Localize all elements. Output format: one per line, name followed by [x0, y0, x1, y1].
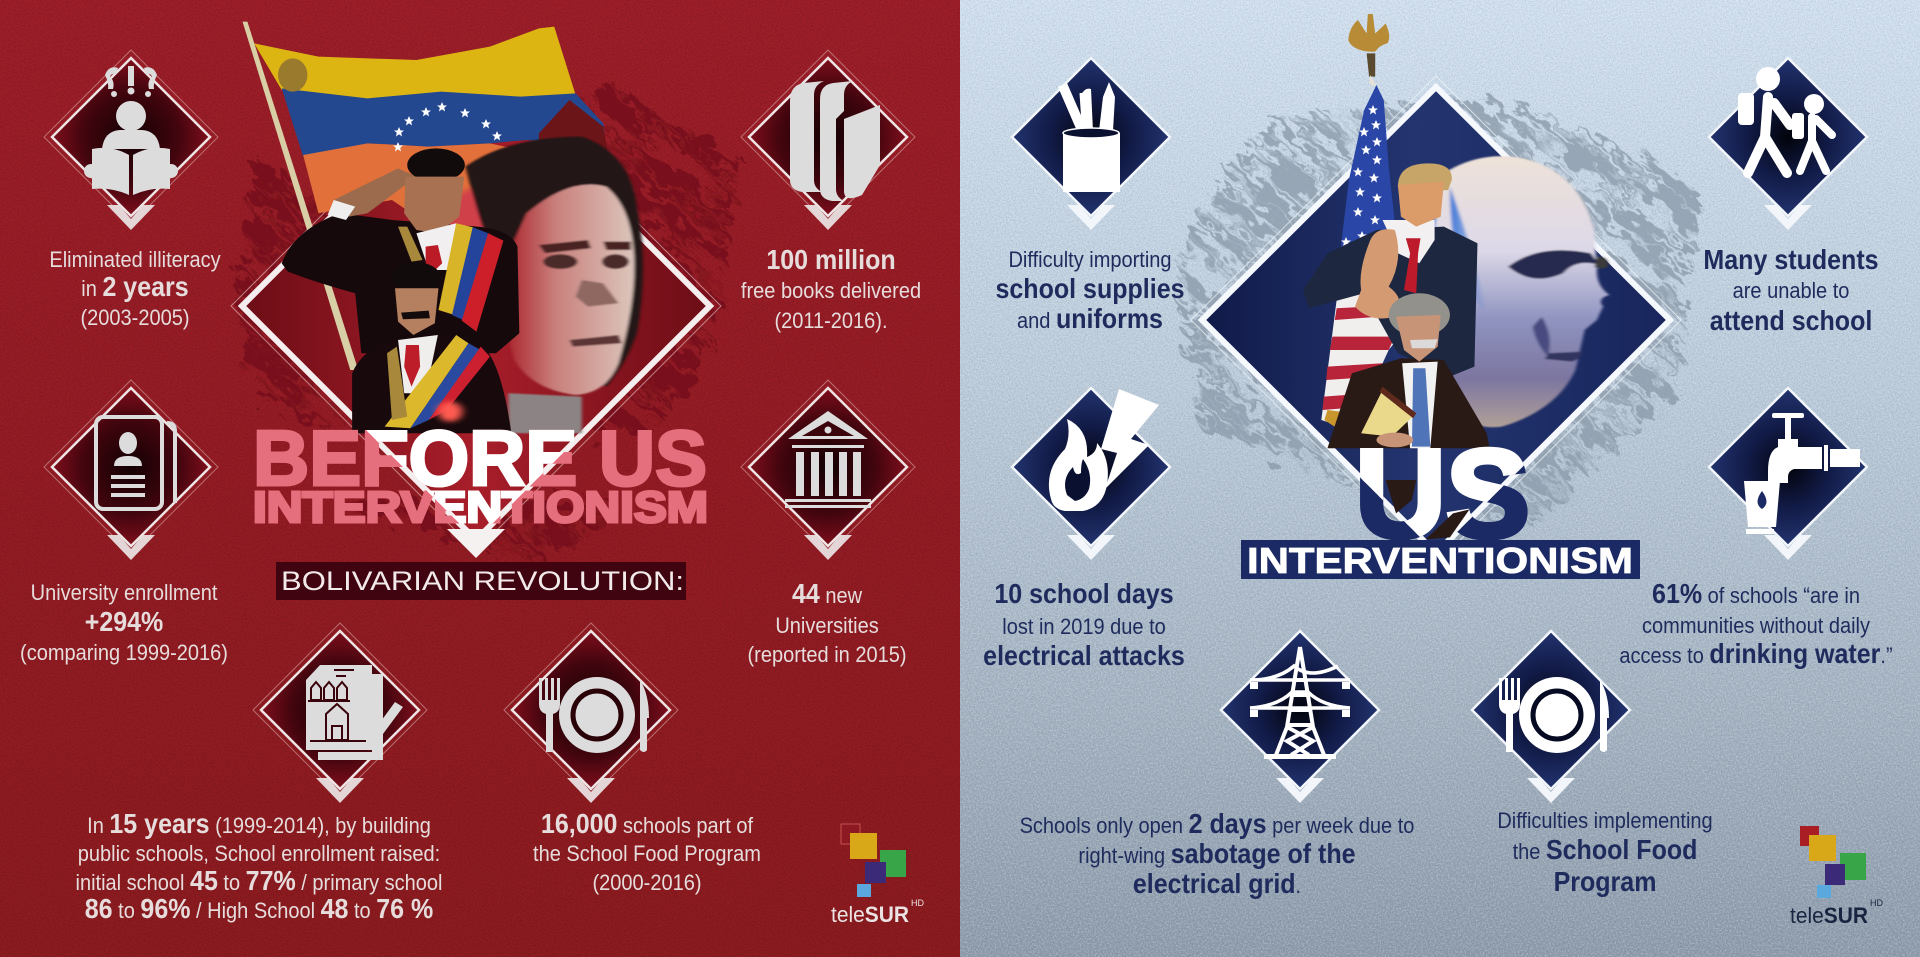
- logo: teleSUR left: teleSUR: [831, 902, 909, 927]
- text: school days lost: electrical attacks: [983, 640, 1185, 671]
- text: illiteracy: in 2 years: [81, 271, 189, 302]
- text: universities: (reported in 2015): [747, 643, 907, 667]
- text: school enrollment: 86 to 96% / High School 48 to 76 %: [85, 893, 433, 924]
- item: illiteracy icon: [44, 50, 218, 230]
- title text white overlap: BEFORE US: [253, 414, 707, 502]
- item: universities icon: [741, 380, 915, 560]
- suit showing through letters: [1386, 480, 1470, 539]
- portrait: Chavez saluting: [282, 148, 519, 353]
- panel: US interventionism: [948, 0, 1920, 957]
- title text white overlap: [366, 429, 574, 524]
- portrait: bald face with blue glow: [1425, 156, 1609, 427]
- text: drinking water: access to drinking water.”: [1619, 638, 1893, 669]
- flag of Venezuela on pole: [243, 22, 608, 370]
- portrait: Bolivar: [441, 137, 643, 433]
- interventionism banner: INTERVENTIONISM: [1247, 540, 1633, 581]
- brush stroke behind portraits: [948, 0, 1920, 819]
- item: students icon: [1709, 58, 1867, 230]
- text: drinking water: communities without daily: [1642, 614, 1870, 638]
- flag stars: [1341, 105, 1382, 276]
- portrait: Maduro: [352, 262, 511, 433]
- title: US interventionism: [1241, 446, 1640, 579]
- item: water tap icon: [1709, 388, 1867, 560]
- text: school enrollment: In 15 years (1999-2014), by building: [87, 808, 431, 839]
- item: enrollment icon: [44, 380, 218, 560]
- big US letters white overlap: US: [1355, 425, 1530, 564]
- red textured background: [0, 0, 960, 957]
- logo: teleSUR right: [1790, 826, 1883, 928]
- text: school days lost: 10 school days: [994, 578, 1174, 609]
- pale blue textured background: [960, 0, 1920, 957]
- text: books: (2011-2016).: [774, 309, 888, 333]
- item: school supplies icon: [1012, 58, 1170, 230]
- text: school food difficulties: the School Food: [1513, 834, 1697, 865]
- text: school supplies: school supplies: [995, 273, 1185, 304]
- portrait: Trump hugging flag: [1303, 163, 1477, 377]
- text: books: free books delivered: [741, 279, 921, 303]
- text: school enrollment: public schools, School enrollment raised:: [78, 842, 440, 866]
- item: books icon: [741, 50, 915, 230]
- item: school food icon: [504, 623, 678, 803]
- text: school enrollment: initial school 45 to 77% / primary school: [76, 865, 442, 896]
- text: school food: (2000-2016): [593, 871, 701, 895]
- US flag with eagle finial: [1321, 14, 1402, 430]
- text: universities: Universities: [775, 614, 879, 638]
- text: illiteracy: (2003-2005): [81, 306, 189, 330]
- central diamond: [231, 61, 721, 551]
- arrow down: [447, 529, 505, 558]
- text: electrical grid: right-wing sabotage of the: [1078, 838, 1356, 869]
- logo: teleSUR right: HD: [1870, 898, 1883, 908]
- portrait: Bolton with folder: [1327, 293, 1490, 448]
- text: school food: the School Food Program: [533, 842, 761, 866]
- text: university enrollment: (comparing 1999-2016): [20, 641, 228, 665]
- text: school food difficulties: Program: [1554, 866, 1656, 897]
- central diamond: [1191, 76, 1681, 564]
- text: books: 100 million: [766, 244, 896, 275]
- logo: teleSUR left: HD: [911, 898, 924, 908]
- heading: Bolivarian Revolution: [276, 562, 686, 600]
- logo: teleSUR left: [831, 824, 924, 927]
- brush stroke behind portraits: [0, 0, 976, 814]
- text: electrical grid: Schools only open 2 days per week due to: [1020, 808, 1414, 839]
- text: illiteracy: Eliminated illiteracy: [49, 248, 221, 272]
- item: electric tower icon: [1221, 631, 1379, 803]
- text: university enrollment: University enrollment: [31, 581, 218, 605]
- text: universities: 44 new: [792, 578, 862, 609]
- title text pink: INTERVENTIONISM: [253, 483, 708, 532]
- text: many students: are unable to: [1733, 279, 1849, 303]
- text: electrical grid: electrical grid.: [1133, 868, 1301, 899]
- panel: before US interventionism: [0, 0, 976, 957]
- item: school food icon: [1472, 631, 1630, 803]
- text: school food: 16,000 schools part of: [541, 808, 753, 839]
- title: before US interventionism: [254, 429, 706, 524]
- heading: Bolivarian Revolution: BOLIVARIAN REVOLUTION:: [281, 566, 684, 596]
- text: many students: Many students: [1703, 244, 1879, 275]
- title text pink: BEFORE US: [253, 414, 707, 502]
- logo: teleSUR right: teleSUR: [1790, 903, 1868, 928]
- flag stars: [393, 102, 502, 152]
- text: school days lost: lost in 2019 due to: [1002, 615, 1166, 639]
- title text white overlap: INTERVENTIONISM: [253, 483, 708, 532]
- text: school supplies: and uniforms: [1017, 303, 1163, 334]
- text: many students: attend school: [1710, 305, 1872, 336]
- text: drinking water: 61% of schools “are in: [1652, 578, 1860, 609]
- item: fire and lightning icon: [1012, 388, 1170, 560]
- item: school building icon: [253, 623, 427, 803]
- text: university enrollment: +294%: [85, 606, 163, 637]
- big US letters navy: US: [1355, 425, 1530, 564]
- text: school supplies: Difficulty importing: [1008, 248, 1172, 272]
- text: school food difficulties: Difficulties implementing: [1497, 809, 1713, 833]
